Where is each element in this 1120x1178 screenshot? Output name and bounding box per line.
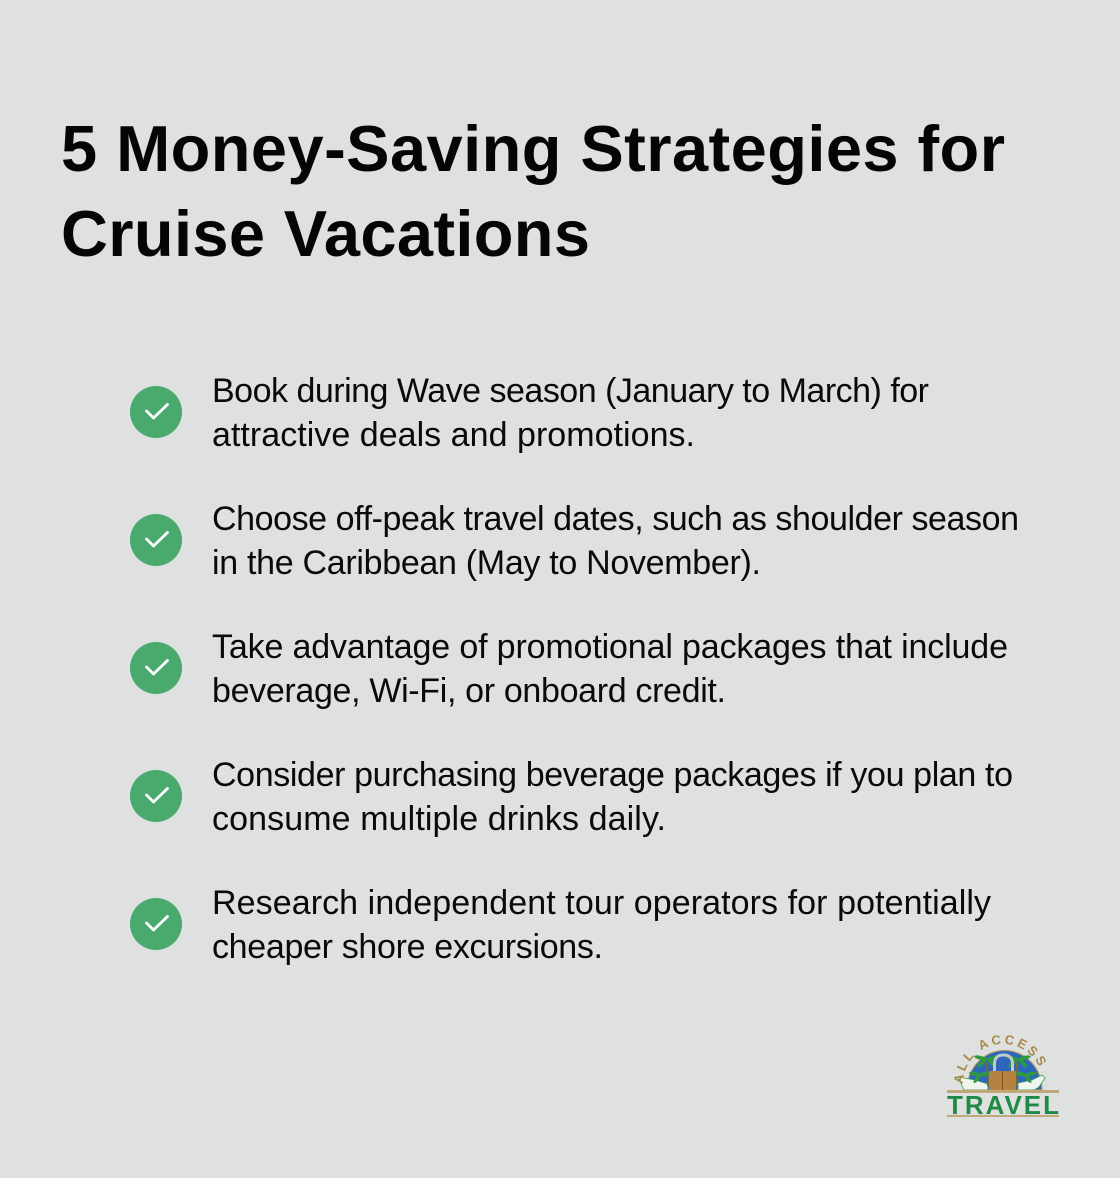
title: 5 Money-Saving Strategies for [61, 112, 1005, 185]
logo bars [947, 1090, 1059, 1093]
text: item 2: in the Caribbean (May to November). [212, 544, 761, 582]
text: item 5 [212, 884, 991, 966]
text: item 1: attractive deals and promotions. [212, 416, 695, 454]
item 4 [130, 756, 1013, 838]
logo arc text: ALL ACCESS [954, 1035, 1046, 1084]
text: item 1: Book during Wave season (January to March) for [212, 372, 929, 410]
text: item 5: cheaper shore excursions. [212, 928, 603, 966]
text: item 3: beverage, Wi-Fi, or onboard credit. [212, 672, 726, 710]
title [61, 112, 1005, 270]
icon: check 2 [130, 514, 182, 566]
logo dome [967, 1050, 1042, 1090]
text: item 4: Consider purchasing beverage packages if you plan to [212, 756, 1013, 794]
icon: check 1 [130, 386, 182, 438]
logo boats [958, 1075, 1045, 1090]
icon: check 5 [130, 898, 182, 950]
text: item 5: Research independent tour operators for potentially [212, 884, 991, 922]
text: item 4 [212, 756, 1013, 838]
text: item 4: consume multiple drinks daily. [212, 800, 666, 838]
logo padlock shackle [994, 1055, 1012, 1072]
item 5 [130, 884, 991, 966]
text: item 1 [212, 372, 929, 454]
text: item 2: Choose off-peak travel dates, such as shoulder season [212, 500, 1019, 538]
item 1 [130, 372, 929, 454]
icon: check 4 [130, 770, 182, 822]
logo padlock body [989, 1071, 1016, 1091]
text: item 2 [212, 500, 1019, 582]
logo wordmark: TRAVEL [947, 1090, 1059, 1120]
item 3 [130, 628, 1008, 710]
logo palms [969, 1054, 1037, 1086]
title: Cruise Vacations [61, 197, 590, 270]
logo: All Access Travel [947, 1035, 1059, 1120]
checklist [130, 372, 1019, 966]
item 2 [130, 500, 1019, 582]
text: item 3: Take advantage of promotional packages that include [212, 628, 1008, 666]
text: item 3 [212, 628, 1008, 710]
icon: check 3 [130, 642, 182, 694]
